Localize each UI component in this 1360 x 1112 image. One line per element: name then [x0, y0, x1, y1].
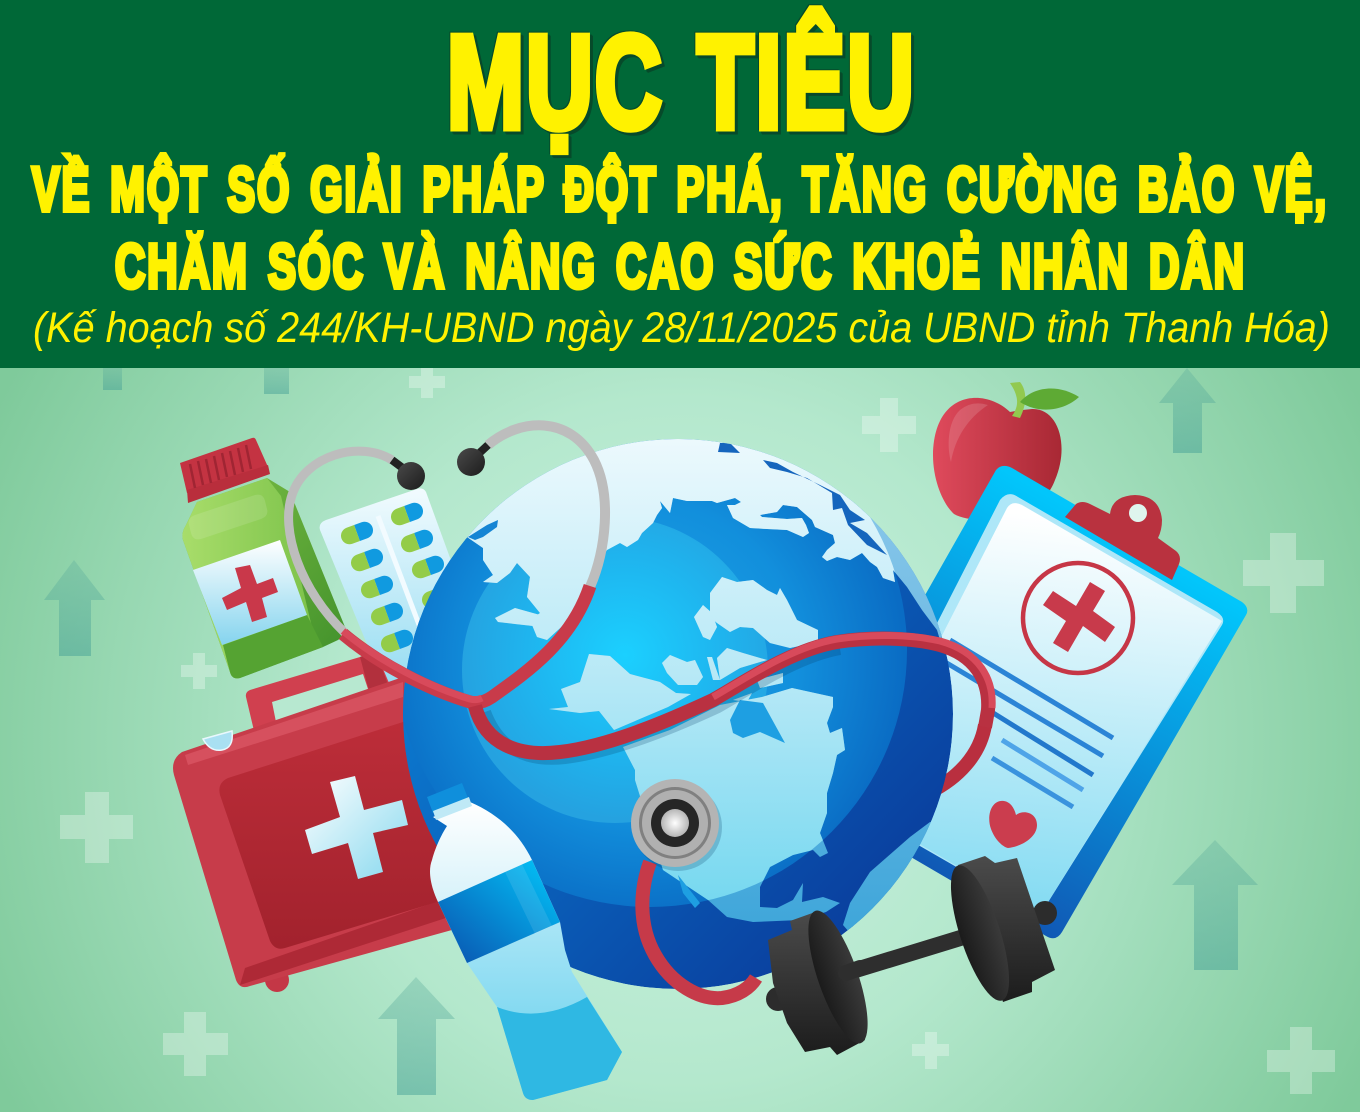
tube shadow — [485, 649, 840, 759]
bar — [846, 932, 980, 973]
earpiece necks — [392, 445, 488, 472]
header band — [0, 0, 1360, 368]
medical cross emblem — [1023, 563, 1133, 673]
icon: pill blister pack — [320, 488, 480, 700]
pills — [339, 500, 446, 655]
clipboard clip — [1065, 495, 1180, 580]
stethoscope — [289, 425, 992, 998]
icon: clipboard — [810, 466, 1247, 938]
icon: first aid kit — [173, 650, 470, 992]
background panel — [0, 368, 1360, 1112]
icon: water bottle — [427, 783, 622, 1100]
left earpiece — [397, 462, 425, 490]
left weight — [766, 904, 880, 1055]
heart — [989, 801, 1037, 848]
gray tubes — [289, 451, 392, 633]
icon: medicine bottle — [180, 438, 345, 678]
right weight — [939, 856, 1057, 1007]
red tube — [343, 586, 992, 998]
text lines — [945, 640, 1113, 807]
globe land — [467, 439, 942, 930]
icon: dumbbell — [766, 856, 1057, 1055]
icon: apple — [933, 382, 1079, 520]
title: MỤC TIÊU — [447, 8, 916, 156]
background arrows — [44, 368, 1258, 1095]
clipboard board — [810, 466, 1247, 938]
clipboard paper — [845, 494, 1223, 915]
background crosses — [60, 366, 1335, 1094]
stethoscope tube behind globe — [930, 725, 985, 792]
stethoscope chest piece — [631, 779, 722, 871]
right earpiece — [457, 448, 485, 476]
globe — [403, 439, 953, 989]
globe ocean — [403, 517, 953, 989]
